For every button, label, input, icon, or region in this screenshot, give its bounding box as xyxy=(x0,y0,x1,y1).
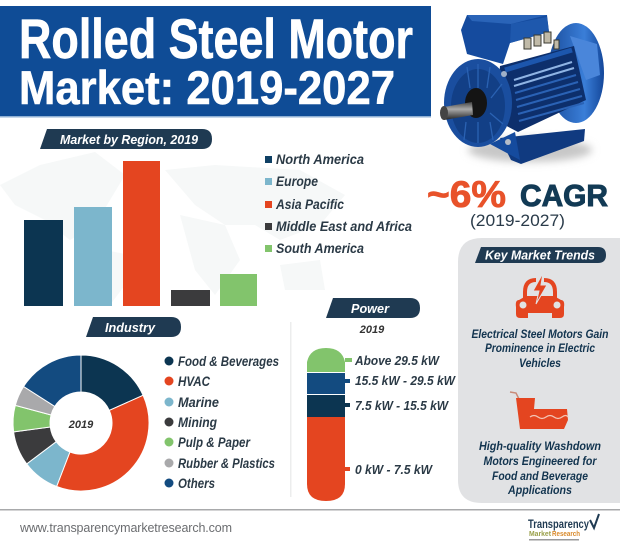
legend: regions: Asia Pacific xyxy=(275,197,344,212)
legend: regions: South America xyxy=(276,241,364,256)
text: electric vehicles trend: Prominence in Electric xyxy=(485,341,595,355)
logo: transparency market research xyxy=(528,514,599,540)
motor end shield xyxy=(444,59,512,147)
bar chart: market by region xyxy=(24,161,257,306)
legend: industry: Pulp & Paper xyxy=(178,435,251,450)
motor illustration xyxy=(440,15,604,164)
CAGR callout: (2019-2027) xyxy=(470,212,565,230)
logo: transparency market research: Transparency xyxy=(528,519,589,531)
power chart year: 2019 xyxy=(359,324,385,336)
motor finned body xyxy=(495,46,586,132)
motor feet xyxy=(500,129,585,164)
pill: key market trends: Key Market Trends xyxy=(485,248,595,262)
labels: power: 15.5 kW - 29.5 kW xyxy=(355,373,457,388)
title banner: Market: 2019-2027 xyxy=(19,61,395,114)
legend: regions: Middle East and Africa xyxy=(276,219,412,234)
legend: industry: Food & Beverages xyxy=(178,354,279,369)
legend: industry: Mining xyxy=(178,415,218,430)
text: washdown motors trend xyxy=(479,439,601,497)
panel: key market trends xyxy=(458,238,620,503)
logo: transparency market research: Market xyxy=(529,531,552,538)
labels: power: 7.5 kW - 15.5 kW xyxy=(355,398,450,413)
website url: www.transparencymarketresearch.com xyxy=(19,521,232,535)
legend: industry xyxy=(164,354,279,491)
text: washdown motors trend: Motors Engineered for xyxy=(484,454,598,468)
motor shaft xyxy=(440,88,487,120)
CAGR callout xyxy=(427,174,608,230)
labels: power: 0 kW - 7.5 kW xyxy=(355,462,434,477)
text: washdown motors trend: Applications xyxy=(507,483,572,497)
pill: power xyxy=(326,298,420,318)
title banner: Rolled Steel Motor xyxy=(19,7,413,70)
title banner xyxy=(0,6,431,118)
legend: industry: Rubber & Plastics xyxy=(178,456,275,471)
legend: industry: HVAC xyxy=(178,374,210,389)
pill: market by region: Market by Region, 2019 xyxy=(60,132,199,147)
thermometer chart: power xyxy=(307,348,352,501)
donut chart: industry xyxy=(13,355,149,491)
icon: electric car xyxy=(516,273,564,318)
motor terminals xyxy=(524,32,559,49)
pill: industry: Industry xyxy=(105,320,156,335)
text: washdown motors trend: Food and Beverage xyxy=(492,469,588,483)
world map watermark xyxy=(0,152,345,305)
labels: power: Above 29.5 kW xyxy=(354,353,441,368)
text: washdown motors trend: High-quality Washdown xyxy=(479,439,601,453)
pill: market by region xyxy=(40,129,212,149)
legend: regions: Europe xyxy=(276,174,318,189)
pill: power: Power xyxy=(351,301,390,316)
icon: food and beverage xyxy=(510,392,568,429)
legend: industry: Others xyxy=(178,476,215,491)
donut centre label: 2019 xyxy=(68,419,94,431)
pill: industry xyxy=(86,317,181,337)
text: electric vehicles trend: Vehicles xyxy=(519,356,561,370)
motor terminal box xyxy=(461,15,549,64)
CAGR callout: ~6% xyxy=(427,174,506,215)
legend: industry: Marine xyxy=(178,395,219,410)
CAGR callout: CAGR xyxy=(520,178,608,213)
motor fan cover xyxy=(548,23,604,123)
labels: power xyxy=(354,353,457,477)
legend: regions xyxy=(265,152,412,256)
text: electric vehicles trend xyxy=(472,327,608,370)
logo: transparency market research: Research xyxy=(552,531,580,538)
legend: regions: North America xyxy=(276,152,364,167)
